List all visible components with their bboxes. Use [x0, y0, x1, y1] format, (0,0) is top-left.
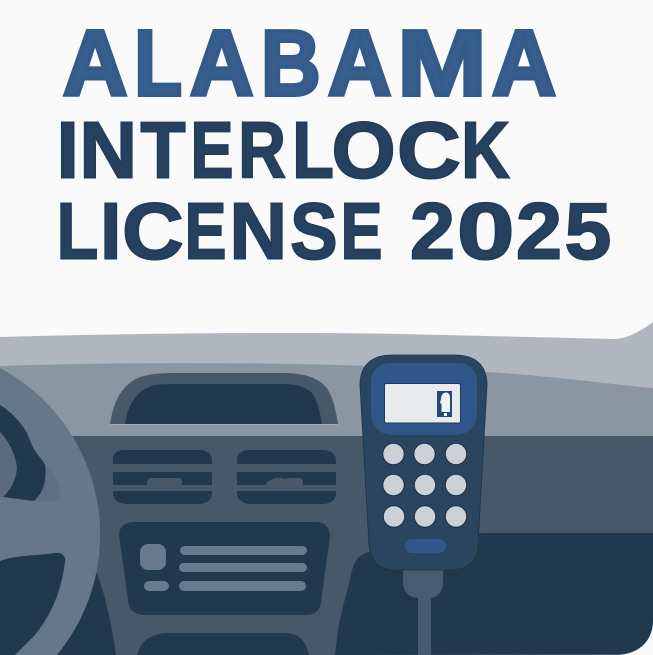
radio small button [144, 581, 169, 591]
air vent left [113, 450, 212, 504]
heading: License 2025: C [122, 186, 184, 276]
heading: License 2025: 2 [516, 186, 562, 276]
device display [384, 384, 460, 423]
interlock device [360, 355, 487, 655]
heading: Interlock: L [292, 106, 334, 194]
title [57, 11, 611, 276]
radio knob [140, 544, 166, 570]
heading: Alabama: A [63, 11, 127, 115]
keypad buttons [383, 443, 467, 527]
heading: Alabama: B [261, 11, 321, 115]
heading: License 2025: 5 [565, 186, 611, 276]
steering wheel [0, 368, 100, 655]
heading: Interlock: E [190, 106, 234, 194]
air vent right [237, 450, 336, 504]
heading: Interlock: N [80, 106, 137, 194]
wheel opening upper [0, 405, 46, 501]
heading: Interlock: K [461, 106, 510, 194]
device pill button [405, 539, 446, 553]
heading: License 2025: 0 [457, 186, 514, 276]
heading: License 2025: E [185, 186, 226, 276]
heading: License 2025: S [290, 186, 338, 276]
dashboard top band [0, 322, 653, 655]
heading: License 2025: N [230, 186, 287, 276]
heading: License 2025: E [341, 186, 382, 276]
radio display lines [179, 546, 307, 591]
heading: Alabama: A [492, 11, 556, 115]
heading: License 2025: I [100, 186, 121, 276]
heading: Interlock: I [57, 106, 79, 194]
car dashboard [0, 322, 653, 655]
heading: Interlock: C [397, 106, 461, 194]
dark lower console [137, 633, 309, 655]
heading: License 2025: 2 [410, 186, 455, 276]
wheel hub inner section [0, 432, 17, 497]
dashboard lower panel [0, 436, 653, 655]
heading: Alabama: M [398, 11, 486, 115]
dark footwell right [335, 533, 653, 655]
display icon [437, 391, 452, 417]
heading: Interlock: O [332, 106, 396, 194]
heading: Alabama: L [134, 11, 182, 115]
heading: Interlock: R [238, 106, 286, 194]
instrument hood [110, 373, 338, 424]
radio panel [119, 522, 330, 615]
heading: Interlock: T [140, 106, 186, 194]
heading: Alabama: A [328, 11, 391, 115]
heading: Alabama: A [190, 11, 253, 115]
dark footwell left [40, 573, 116, 655]
device body [360, 355, 487, 570]
wheel opening lower [0, 553, 65, 655]
device screen bezel [371, 363, 477, 435]
heading: License 2025: L [57, 186, 98, 276]
device cord [403, 565, 443, 655]
dashboard middle band [0, 363, 653, 437]
wheel opening upper light section [34, 465, 61, 502]
